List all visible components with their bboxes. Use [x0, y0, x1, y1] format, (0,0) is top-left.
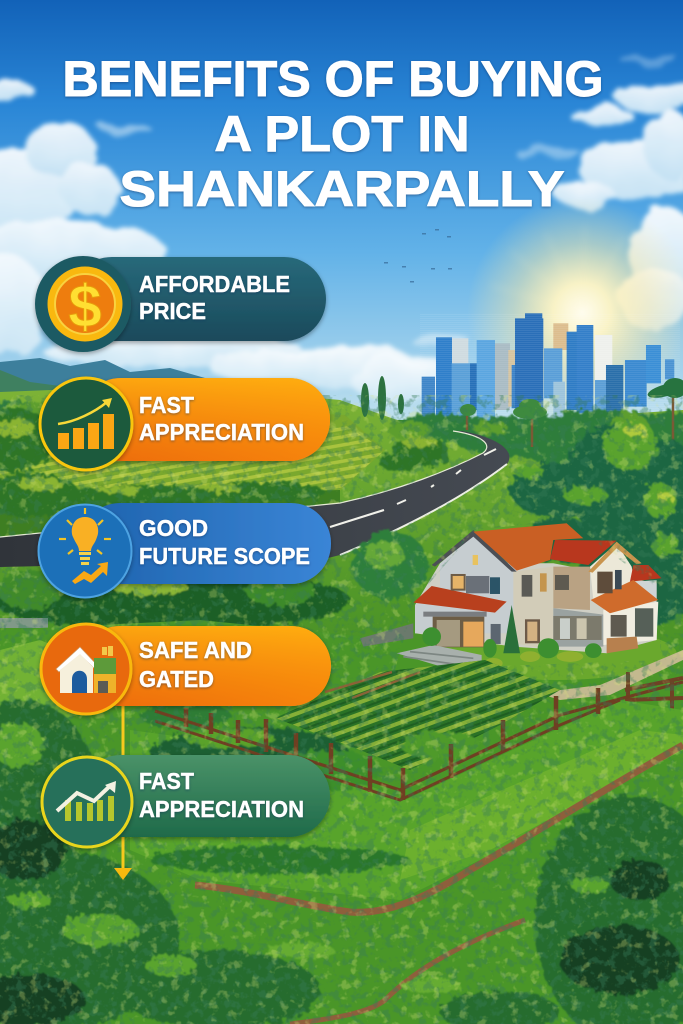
icon: light bulb with arrow — [38, 504, 132, 598]
dirt path — [195, 745, 683, 912]
trees along left fields — [0, 408, 448, 517]
pill: affordable price — [35, 256, 326, 352]
connector arrow — [114, 700, 132, 880]
label: safe and gated: GATED — [139, 666, 214, 692]
pill: fast appreciation orange — [40, 378, 330, 470]
terraced fields left — [0, 405, 385, 560]
crop field — [275, 660, 560, 770]
trees right of road — [510, 420, 683, 630]
sun glow — [467, 197, 683, 427]
label: good future scope: FUTURE SCOPE — [139, 543, 310, 569]
icon: dollar coin: $ — [68, 273, 102, 340]
label: affordable price — [139, 271, 290, 324]
lawn foreground — [130, 700, 683, 900]
title: A PLOT IN — [214, 106, 470, 162]
title: SHANKARPALLY — [120, 161, 564, 217]
wooden fence — [155, 682, 683, 800]
sky background — [0, 0, 683, 420]
palm and cypress trees — [361, 376, 683, 455]
label: fast appreciation: APPRECIATION — [139, 796, 304, 822]
label: fast appreciation — [139, 392, 304, 445]
label: affordable price: PRICE — [139, 298, 206, 324]
foliage texture overlay — [0, 395, 683, 1024]
label: good future scope — [139, 515, 310, 569]
label: good future scope: GOOD — [139, 515, 208, 541]
mid lawn — [0, 620, 683, 1024]
road — [0, 431, 509, 567]
far tree line behind road — [0, 401, 683, 488]
label: fast appreciation — [139, 768, 304, 822]
label: safe and gated — [139, 637, 252, 692]
label: affordable price: AFFORDABLE — [139, 271, 290, 297]
label: safe and gated: SAFE AND — [139, 637, 252, 663]
distant hills — [0, 358, 212, 405]
pill: good future scope — [38, 503, 331, 598]
icon: rising bar chart — [40, 378, 132, 470]
birds — [384, 229, 452, 282]
shrubs by fence — [140, 701, 480, 874]
label: fast appreciation: FAST — [139, 392, 194, 418]
ground — [0, 385, 683, 1024]
pill: safe and gated — [41, 624, 331, 714]
icon: dollar coin — [35, 256, 131, 352]
house — [360, 523, 677, 680]
garden path and fence by house — [480, 650, 683, 710]
band of trees left middle — [0, 531, 428, 630]
city skyline — [360, 313, 680, 423]
title: BENEFITS OF BUYING — [62, 51, 604, 107]
label: fast appreciation: APPRECIATION — [139, 419, 304, 445]
pill: fast appreciation green — [42, 755, 330, 847]
foreground foliage — [0, 700, 683, 1024]
title — [62, 51, 604, 217]
icon: growth chart with arrow — [42, 757, 132, 847]
clouds — [0, 56, 683, 402]
icon: gated house — [41, 624, 131, 714]
label: fast appreciation: FAST — [139, 768, 194, 794]
